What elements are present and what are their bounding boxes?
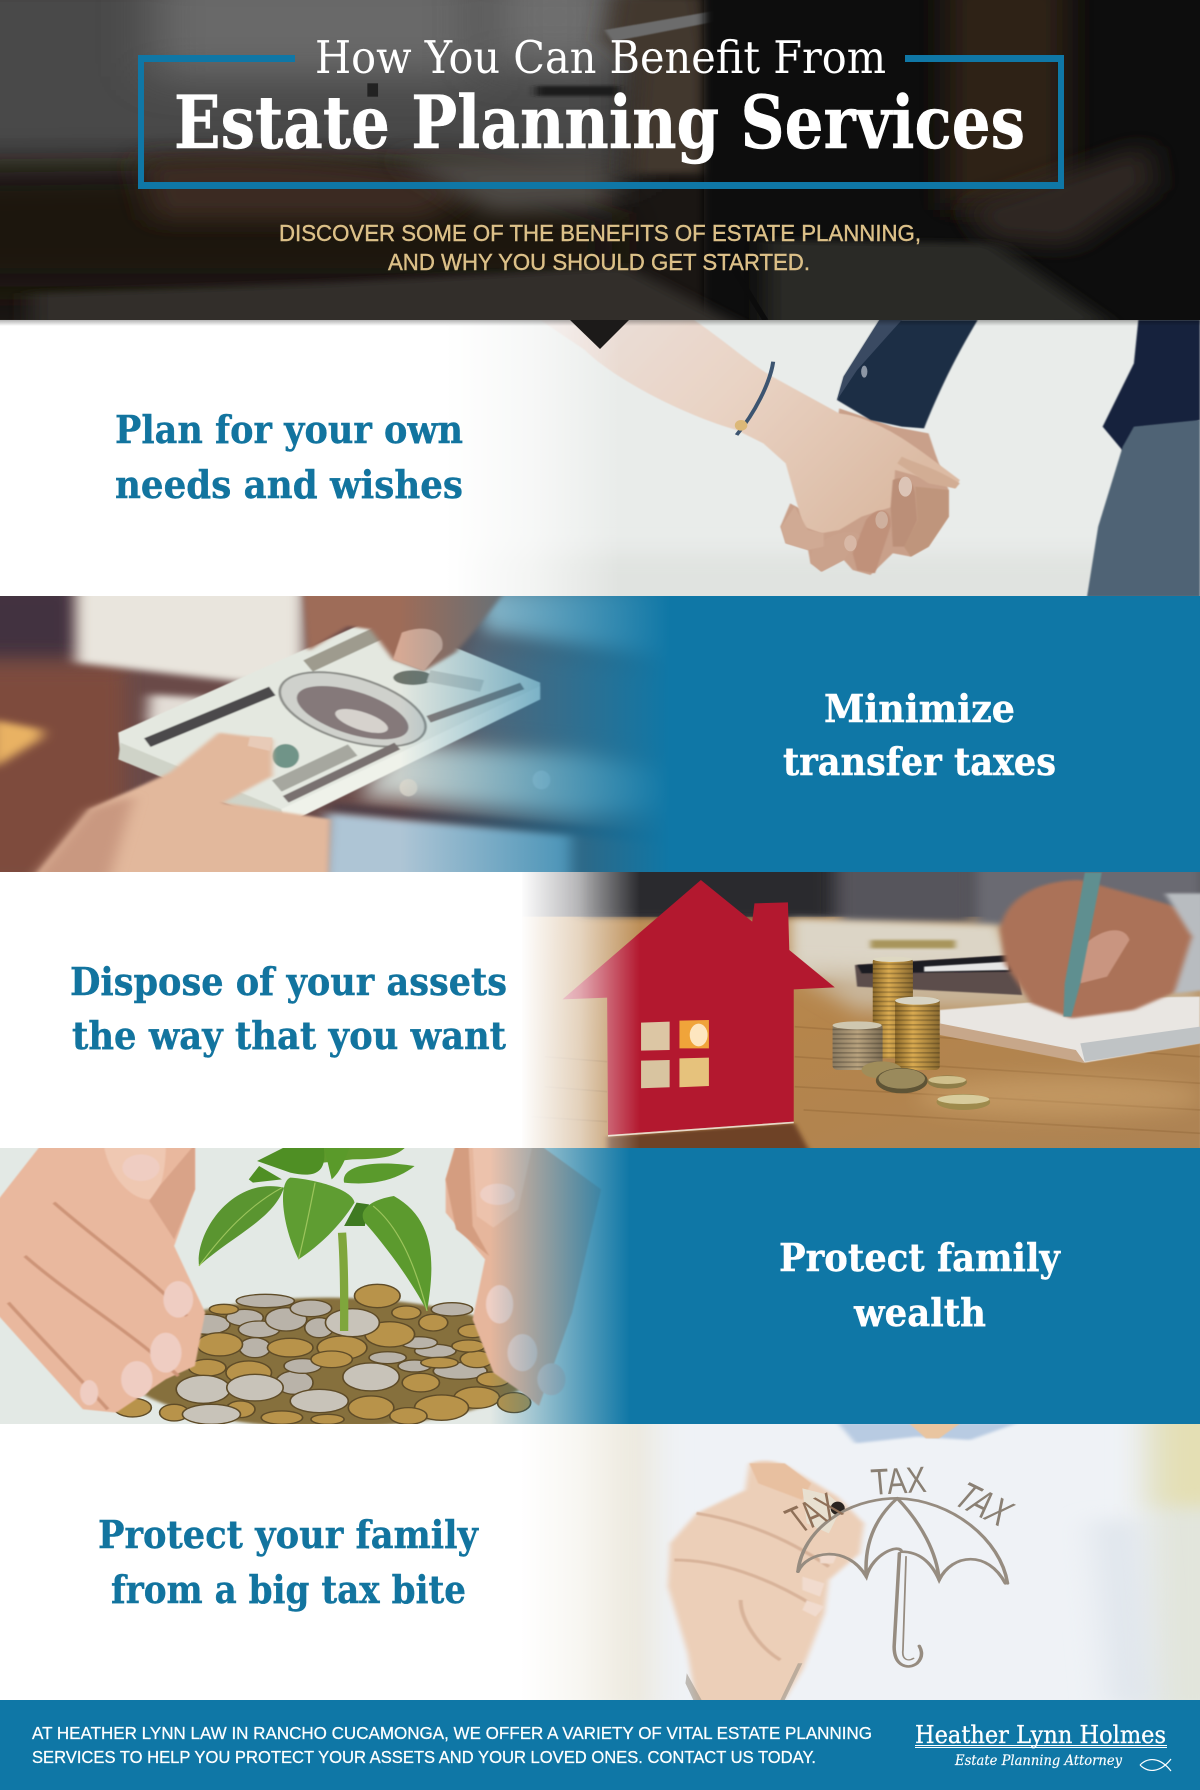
- white fade: [446, 320, 592, 596]
- blue panel with fade: [490, 1148, 630, 1424]
- table grain: [531, 1027, 1200, 1133]
- right hand: [446, 1144, 601, 1406]
- notebook: [940, 997, 1200, 1063]
- subheading: [279, 220, 921, 275]
- stem and leaves: [342, 1233, 344, 1331]
- top hand: [304, 593, 504, 671]
- handwritten tax labels: [778, 1460, 1022, 1541]
- handwritten tax labels: TAX: [778, 1486, 850, 1541]
- subheading: AND WHY YOU SHOULD GET STARTED.: [388, 249, 810, 275]
- panel: footer: [0, 1700, 1200, 1790]
- photo: dark meeting background: [0, 0, 1200, 330]
- title frame: [138, 55, 1064, 189]
- blue panel with fade: [400, 596, 670, 872]
- heading: plan for your own needs and wishes: [116, 414, 462, 500]
- heading: protect your family from a big tax bite: from a big tax bite: [111, 1567, 466, 1612]
- icon: fish: [1140, 1759, 1171, 1771]
- photo: hands around plant and coins: [0, 1144, 650, 1428]
- heading: plan for your own needs and wishes: Plan for your own: [115, 407, 463, 452]
- photo: hand drawing tax umbrella: [494, 1407, 1200, 1713]
- footer call to action: [32, 1723, 872, 1767]
- panel: minimize transfer taxes: [0, 596, 1200, 872]
- handwritten tax labels: TAX: [869, 1460, 928, 1503]
- subheading: DISCOVER SOME OF THE BENEFITS OF ESTATE PLANNING,: [279, 220, 921, 246]
- panel: dispose of your assets: [71, 872, 1200, 1148]
- photo: money handover: [0, 579, 714, 889]
- white fade: [520, 1424, 640, 1700]
- panel: protect family wealth: [0, 1144, 1200, 1428]
- hand and pen: [1000, 880, 1200, 1018]
- heading: protect family wealth: [779, 1235, 1061, 1335]
- hand: [668, 1461, 864, 1707]
- lower hand: [35, 732, 333, 872]
- heading: dispose of your assets the way that you want: [70, 959, 507, 1058]
- umbrella drawing: [798, 1498, 1008, 1666]
- coin stacks: [873, 958, 913, 1058]
- heading: plan for your own needs and wishes: needs and wishes: [115, 462, 463, 507]
- icon: header notch arrow: [570, 320, 629, 349]
- heading: protect your family from a big tax bite: Protect your family: [98, 1512, 479, 1557]
- coin pile: [114, 1284, 539, 1428]
- heading: minimize transfer taxes: Minimize: [824, 686, 1015, 731]
- title: [174, 31, 1025, 166]
- heading: dispose of your assets the way that you want: the way that you want: [72, 1013, 506, 1058]
- handwritten tax labels: TAX: [945, 1476, 1022, 1534]
- logo: Heather Lynn Holmes: [915, 1721, 1167, 1769]
- photo: paper house and coins: [500, 863, 1200, 1157]
- stack of bills: [118, 616, 540, 824]
- panel: protect your family from a tax bite: [0, 1407, 1200, 1713]
- red paper house: [562, 880, 835, 1135]
- heading: minimize transfer taxes: [784, 692, 1055, 776]
- white fade: [520, 872, 640, 1148]
- logo: Heather Lynn Holmes: Heather Lynn Holmes: [915, 1721, 1166, 1749]
- footer call to action: SERVICES TO HELP YOU PROTECT YOUR ASSETS AND YOUR LOVED ONES. CONTACT US TODAY.: [32, 1747, 816, 1767]
- heading: minimize transfer taxes: transfer taxes: [783, 739, 1056, 784]
- title: How You Can Benefit From: [315, 31, 886, 84]
- left hand: [0, 1144, 205, 1413]
- logo: Heather Lynn Holmes: Estate Planning Attorney: [954, 1753, 1122, 1769]
- panel: header: [0, 0, 1200, 330]
- footer call to action: AT HEATHER LYNN LAW IN RANCHO CUCAMONGA, WE OFFER A VARIETY OF VITAL ESTATE PLANNING: [32, 1723, 872, 1743]
- heading: dispose of your assets the way that you want: Dispose of your assets: [70, 959, 507, 1004]
- photo: holding hands: [505, 320, 1200, 596]
- heading: protect family wealth: wealth: [853, 1290, 986, 1335]
- panel: plan for your own needs: [0, 320, 1200, 620]
- heading: protect your family from a big tax bite: [98, 1512, 479, 1612]
- title: Estate Planning Services: [174, 80, 1025, 166]
- heading: protect family wealth: Protect family: [779, 1235, 1061, 1280]
